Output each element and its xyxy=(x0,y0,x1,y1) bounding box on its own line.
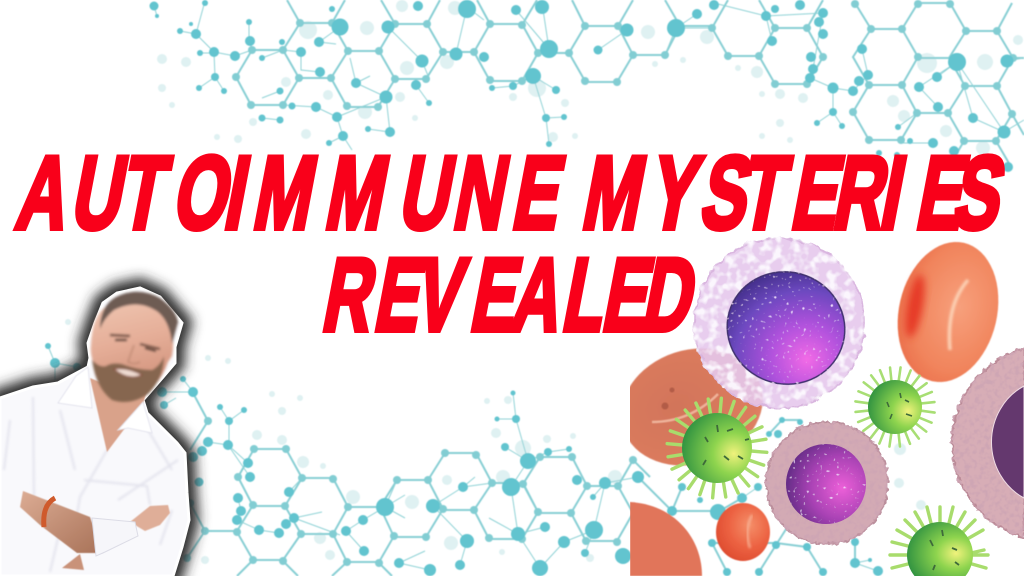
forearm xyxy=(20,491,103,553)
red blood cell: top right xyxy=(896,241,1000,383)
hair xyxy=(100,292,178,344)
thin bonds: bottom xyxy=(48,346,878,571)
faint background dots: bottom xyxy=(65,319,926,564)
beard xyxy=(92,356,164,402)
virus: upper right xyxy=(854,366,936,448)
hand xyxy=(130,505,170,531)
virus: bottom right xyxy=(890,507,988,576)
face xyxy=(91,296,173,401)
mouth xyxy=(114,369,142,377)
red blood cell: bottom left xyxy=(630,502,702,576)
lymphocyte: right edge xyxy=(952,348,1024,538)
title line 2: REVEALED xyxy=(316,236,706,353)
molecule dots: bottom xyxy=(45,343,883,576)
neck and open collar xyxy=(90,378,150,452)
presenter photo cutout xyxy=(0,288,189,576)
nucleus xyxy=(786,444,866,524)
nucleus xyxy=(726,270,846,386)
molecular network: bottom xyxy=(45,319,926,576)
bracelet xyxy=(44,498,55,527)
red blood cell: small xyxy=(716,503,770,561)
blood cells and viruses illustration xyxy=(606,232,1024,576)
title line 1, second word: MYSTERIES xyxy=(575,134,1015,251)
lymphocyte: lower centre xyxy=(766,422,888,544)
shirt cuff xyxy=(92,518,138,556)
hexagon lattice: top xyxy=(236,0,1024,165)
shirt folds xyxy=(4,397,178,572)
faint background dots: top xyxy=(157,0,1023,155)
molecule dots: top xyxy=(150,0,1014,172)
collar xyxy=(58,367,152,433)
lattice junction nodes: top xyxy=(232,0,1017,145)
dark glow behind presenter xyxy=(0,288,189,576)
hexagon lattice: bottom xyxy=(187,393,855,576)
title xyxy=(9,134,1015,353)
molecular network: top xyxy=(150,0,1024,172)
lower hand xyxy=(62,554,84,570)
nucleus xyxy=(991,386,1024,498)
title line 1, first word: AUTOIMMUNE xyxy=(9,134,573,251)
red blood cell: left xyxy=(630,348,763,466)
brows xyxy=(110,335,160,349)
lattice junction nodes: bottom xyxy=(183,389,637,567)
lymphocyte: large purple xyxy=(694,238,864,408)
shirt and silhouette xyxy=(0,288,189,576)
nose shadow xyxy=(128,345,140,364)
head xyxy=(91,292,178,402)
virus: left xyxy=(663,394,771,502)
eyes xyxy=(115,340,156,351)
thin bonds: top xyxy=(154,1,1024,150)
